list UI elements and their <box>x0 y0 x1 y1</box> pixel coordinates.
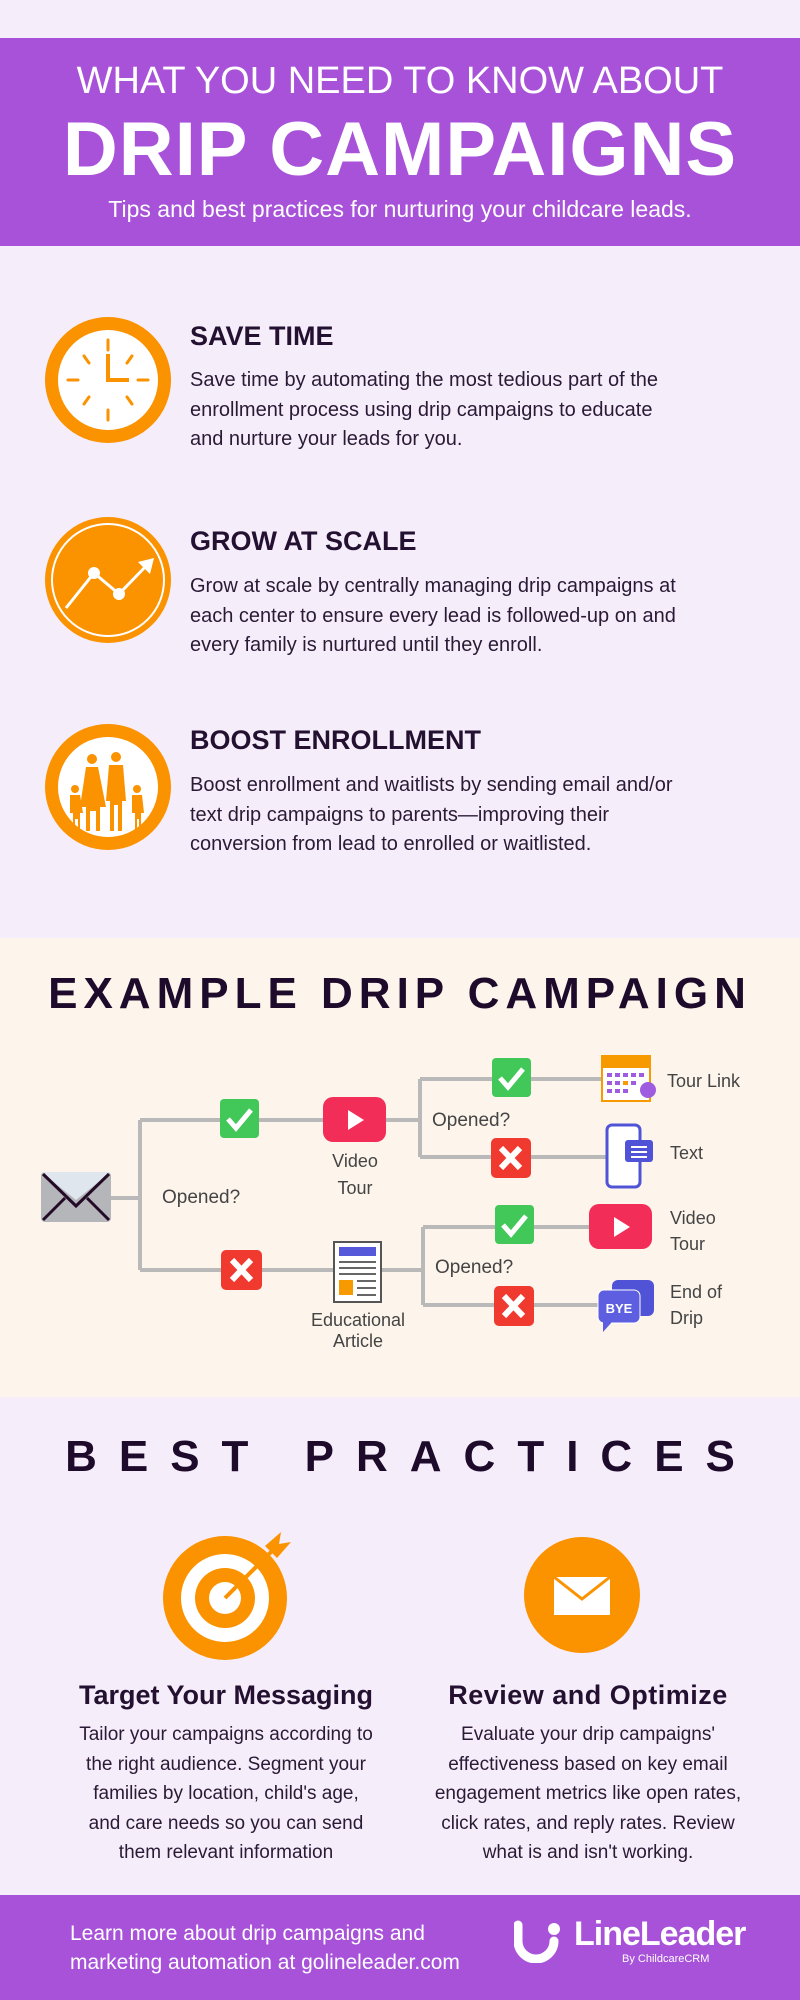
text: target: and care needs so you can send <box>89 1812 363 1834</box>
text: target: them relevant information <box>119 1842 333 1863</box>
logo: LineLeader <box>574 1915 745 1953</box>
icon: video 2 <box>589 1204 652 1249</box>
label educational article: Educational <box>311 1310 405 1330</box>
text: target <box>79 1724 373 1863</box>
icon: family <box>45 724 171 850</box>
icon: envelope circle <box>524 1537 640 1653</box>
icon: article <box>334 1242 381 1302</box>
text: review <box>435 1724 741 1863</box>
text: review: click rates, and reply rates. Review <box>441 1812 735 1834</box>
text: save time <box>190 369 658 450</box>
heading: save time: SAVE TIME <box>190 321 334 351</box>
check 3 <box>495 1205 534 1244</box>
text: target: the right audience. Segment your <box>86 1754 366 1774</box>
text: grow at scale: every family is nurtured until they enroll. <box>190 634 542 656</box>
text: boost enrollment: Boost enrollment and waitlists by sending email and/or <box>190 774 672 796</box>
icon: video 1 <box>323 1097 386 1142</box>
icon: growth chart <box>45 517 171 643</box>
check 1 <box>220 1099 259 1138</box>
flow diagram <box>41 1055 741 1351</box>
label opened 3: Opened? <box>435 1257 513 1278</box>
label opened 1: Opened? <box>162 1187 240 1208</box>
text: save time: enrollment process using drip campaigns to educate <box>190 398 652 420</box>
text: review: engagement metrics like open rates, <box>435 1783 741 1804</box>
panel: example drip campaign <box>0 938 800 1397</box>
label end of drip: End of <box>670 1282 722 1302</box>
heading: best practices: BEST PRACTICES <box>65 1432 757 1481</box>
icon: envelope <box>41 1172 111 1222</box>
x 2 <box>491 1138 531 1178</box>
logo: By ChildcareCRM <box>622 1953 709 1965</box>
heading: grow at scale: GROW AT SCALE <box>190 526 416 556</box>
label video tour 2: Tour <box>670 1234 705 1254</box>
x 1 <box>221 1250 262 1290</box>
title line 1: WHAT YOU NEED TO KNOW ABOUT <box>77 60 723 102</box>
text: review: effectiveness based on key email <box>448 1754 728 1774</box>
text: boost enrollment: text drip campaigns to parents—improving their <box>190 804 609 826</box>
footer text: marketing automation at golineleader.com <box>70 1951 460 1974</box>
text: boost enrollment: conversion from lead to enrolled or waitlisted. <box>190 833 591 855</box>
heading: target your messaging: Target Your Messaging <box>79 1680 373 1710</box>
logo <box>514 1915 746 1965</box>
check 2 <box>492 1058 531 1097</box>
label end of drip: Drip <box>670 1308 703 1328</box>
label text: Text <box>670 1143 703 1163</box>
top band <box>0 0 800 38</box>
footer <box>0 1895 800 2000</box>
header banner <box>0 38 800 246</box>
text: grow at scale: each center to ensure every lead is followed-up on and <box>190 604 676 626</box>
text: target: Tailor your campaigns according to <box>79 1724 373 1745</box>
footer text: Learn more about drip campaigns and <box>70 1922 425 1945</box>
text: grow at scale <box>190 575 676 656</box>
label opened 2: Opened? <box>432 1110 510 1131</box>
icon: target <box>163 1532 291 1660</box>
text: boost enrollment <box>190 774 672 855</box>
icon: phone <box>607 1125 653 1187</box>
footer text <box>70 1922 460 1974</box>
label video tour: Video <box>332 1151 378 1171</box>
title main: DRIP CAMPAIGNS <box>63 107 737 192</box>
icon: bye bubble: BYE <box>606 1301 633 1316</box>
heading: boost enrollment: BOOST ENROLLMENT <box>190 725 481 755</box>
icon: clock <box>45 317 171 443</box>
text: save time: Save time by automating the most tedious part of the <box>190 369 658 391</box>
icon: calendar <box>602 1056 656 1101</box>
label educational article: Article <box>333 1331 383 1351</box>
label video tour: Tour <box>337 1178 373 1198</box>
heading: example drip campaign: EXAMPLE DRIP CAMPAIGN <box>48 969 752 1018</box>
label tour link: Tour Link <box>667 1071 741 1091</box>
text: review: Evaluate your drip campaigns' <box>461 1724 715 1745</box>
x 3 <box>494 1286 534 1326</box>
text: grow at scale: Grow at scale by centrally managing drip campaigns at <box>190 575 676 597</box>
text: target: families by location, child's age, <box>93 1783 359 1804</box>
text: review: what is and isn't working. <box>483 1842 693 1863</box>
subtitle: Tips and best practices for nurturing your childcare leads. <box>108 196 692 222</box>
icon: bye bubble <box>598 1280 654 1332</box>
heading: review and optimize: Review and Optimize <box>448 1680 728 1710</box>
label video tour 2: Video <box>670 1208 716 1228</box>
text: save time: and nurture your leads for you. <box>190 428 462 450</box>
